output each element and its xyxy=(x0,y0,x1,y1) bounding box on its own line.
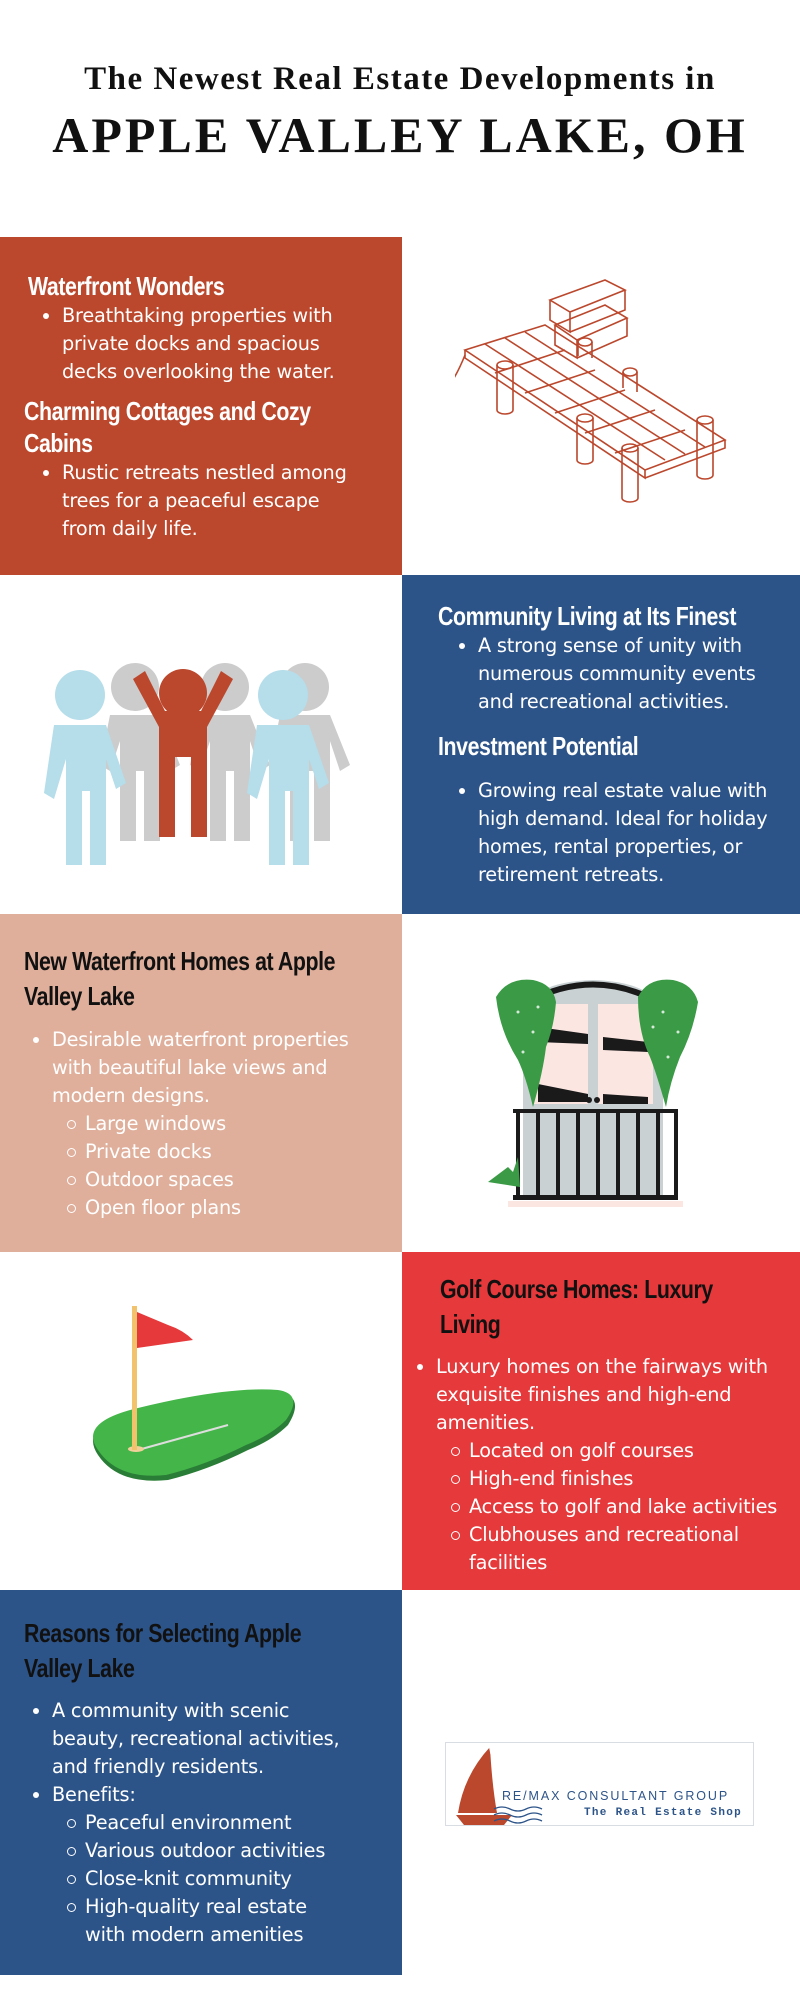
title: The Newest Real Estate Developments in xyxy=(84,61,716,97)
text: investment bullet: Growing real estate value with high demand. Ideal for holiday homes, rental properties, or retirement retreats. xyxy=(478,779,768,886)
heading: investment: Investment Potential xyxy=(438,731,638,761)
text: golf bullets: High-end finishes xyxy=(469,1467,633,1490)
text: waterfront homes bullets: Desirable waterfront properties with beautiful lake views and modern designs. xyxy=(52,1028,349,1107)
heading: reasons: Reasons for Selecting Apple Valley Lake xyxy=(24,1618,301,1683)
text: golf bullets: Access to golf and lake activities xyxy=(469,1495,777,1518)
text: reasons bullets: A community with scenic beauty, recreational activities, and friendly residents. xyxy=(52,1699,339,1778)
text: golf bullets: Located on golf courses xyxy=(469,1439,694,1462)
icon: balcony window xyxy=(488,980,698,1207)
panel: waterfront wonders xyxy=(0,237,402,575)
text: reasons bullets: Peaceful environment xyxy=(85,1811,291,1834)
text: reasons bullets: Various outdoor activities xyxy=(85,1839,325,1862)
text: reasons bullets: Benefits: xyxy=(52,1783,136,1806)
text: reasons bullets xyxy=(33,1699,339,1946)
title: APPLE VALLEY LAKE, OH xyxy=(52,107,748,163)
heading: waterfront wonders: Waterfront Wonders xyxy=(28,271,224,301)
text: golf bullets xyxy=(417,1355,777,1574)
text: logo name: RE/MAX CONSULTANT GROUP xyxy=(502,1789,729,1803)
heading: golf course homes: Golf Course Homes: Luxury Living xyxy=(440,1274,713,1339)
heading: cottages: Charming Cottages and Cozy Cabins xyxy=(24,396,311,458)
panel: reasons xyxy=(0,1590,402,1975)
title xyxy=(52,61,748,163)
icon: golf flag xyxy=(93,1306,296,1481)
text: golf bullets: Clubhouses and recreational facilities xyxy=(469,1523,739,1574)
icon: people xyxy=(44,663,350,865)
panel: new waterfront homes xyxy=(0,914,402,1252)
text: cottages bullet: Rustic retreats nestled among trees for a peaceful escape from daily life. xyxy=(62,461,347,540)
text: waterfront homes bullets: Private docks xyxy=(85,1140,212,1163)
heading: community living: Community Living at Its Finest xyxy=(438,601,736,631)
logo: RE/MAX consultant group xyxy=(445,1742,754,1826)
icon: sailboat xyxy=(456,1747,542,1825)
text: waterfront homes bullets: Large windows xyxy=(85,1112,226,1135)
text: waterfront homes bullets xyxy=(33,1028,349,1219)
heading: new waterfront homes: New Waterfront Homes at Apple Valley Lake xyxy=(24,946,335,1011)
icon: dock xyxy=(455,279,727,503)
text: reasons bullets: Close-knit community xyxy=(85,1867,292,1890)
text: waterfront homes bullets: Open floor plans xyxy=(85,1196,241,1219)
panel: golf course homes xyxy=(402,1252,800,1590)
text: waterfront homes bullets: Outdoor spaces xyxy=(85,1168,234,1191)
text: waterfront bullet: Breathtaking properties with private docks and spacious decks overlooking the water. xyxy=(62,304,335,383)
text: golf bullets: Luxury homes on the fairways with exquisite finishes and high-end amenities. xyxy=(436,1355,768,1434)
text: community bullet: A strong sense of unity with numerous community events and recreational activities. xyxy=(478,634,756,713)
text: reasons bullets: High-quality real estate with modern amenities xyxy=(85,1895,307,1946)
logo: RE/MAX consultant group: The Real Estate Shop xyxy=(584,1807,742,1819)
panel: community xyxy=(402,575,800,914)
